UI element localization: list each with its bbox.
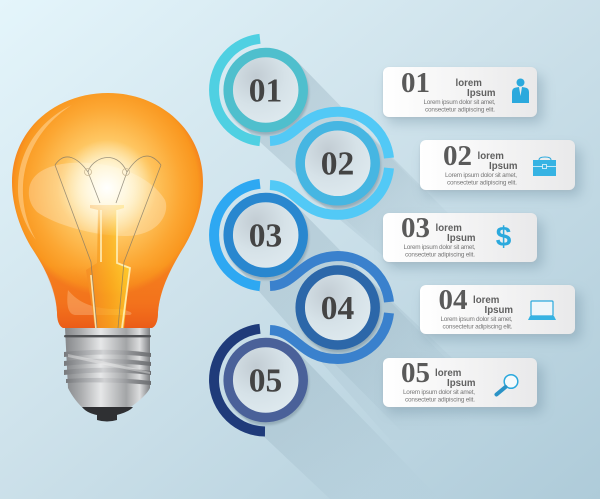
lower reflection <box>67 290 132 315</box>
card 01 heading: Ipsum <box>467 88 496 99</box>
ring shadow 04 <box>297 268 381 352</box>
disc 04 <box>305 274 371 340</box>
disc 02 <box>305 130 371 196</box>
card 03 number: 03 <box>401 212 430 244</box>
outer arc 01 <box>214 39 260 141</box>
filament <box>55 156 161 328</box>
card 03 body: Lorem ipsum dolor sit amet, <box>404 244 476 251</box>
stem light edge <box>91 210 130 328</box>
card 01 number: 01 <box>401 67 430 99</box>
light bulb <box>12 93 203 422</box>
ring 04 <box>300 270 375 345</box>
bulb lower tint <box>42 265 172 328</box>
stem <box>86 205 130 328</box>
card 02 number: 02 <box>443 140 472 172</box>
ring shadow 03 <box>225 196 309 280</box>
card 01 <box>383 67 543 123</box>
base collar <box>64 335 151 337</box>
base cap <box>82 407 133 422</box>
card 04 heading: lorem <box>473 295 500 306</box>
disc 01 <box>233 57 299 123</box>
icon: laptop <box>528 301 556 320</box>
card 01 body: Lorem ipsum dolor sit amet, <box>424 99 496 106</box>
card 03 <box>383 212 543 268</box>
rim highlight <box>18 105 72 240</box>
card 03 heading: Ipsum <box>447 233 476 244</box>
ring 01 <box>228 52 303 128</box>
number 01: 01 <box>249 72 282 110</box>
card 04 heading: Ipsum <box>484 305 513 316</box>
card 05 <box>383 357 543 413</box>
card 05 heading: lorem <box>435 368 462 379</box>
metal base <box>65 328 150 409</box>
card 05 heading: Ipsum <box>447 378 476 389</box>
long shadows behind circles <box>236 60 470 499</box>
card 02 <box>420 140 581 196</box>
icon: dollar sign: $ <box>496 221 512 252</box>
step 04 circle <box>270 256 389 359</box>
card 02 heading: lorem <box>478 151 504 162</box>
bulb highlight <box>29 163 166 236</box>
ring 03 <box>228 198 303 272</box>
outer arcs 02 <box>270 112 389 215</box>
card 05 number: 05 <box>401 357 430 389</box>
card 02 heading: Ipsum <box>489 161 518 172</box>
number 03: 03 <box>249 218 282 254</box>
outer arcs 04 <box>270 256 389 359</box>
outer arc 05 <box>214 329 265 432</box>
step 05 circle <box>214 329 309 432</box>
bulb glass <box>12 93 203 328</box>
icon: person <box>512 78 529 103</box>
card 03 body: consectetur adipiscing elit. <box>405 252 475 258</box>
card 04 number: 04 <box>438 284 468 316</box>
card 05 body: consectetur adipiscing elit. <box>405 396 475 404</box>
card 05 body: Lorem ipsum dolor sit amet, <box>403 389 475 396</box>
disc 03 <box>233 202 299 268</box>
disc 05 <box>233 347 299 413</box>
card 01 body: consectetur adipiscing elit. <box>425 106 495 114</box>
number 04: 04 <box>321 290 354 327</box>
icon: magnifier <box>496 375 518 394</box>
card 02 body: consectetur adipiscing elit. <box>447 180 517 186</box>
step 03 circle <box>214 184 309 286</box>
outer arc 03 <box>214 184 260 286</box>
screw thread <box>64 350 151 385</box>
number 02: 02 <box>321 146 354 182</box>
ring 02 <box>300 126 375 201</box>
card 03 heading: lorem <box>436 223 462 234</box>
card 01 heading: lorem <box>456 78 482 89</box>
ring 05 <box>228 342 303 418</box>
number 05: 05 <box>249 362 282 400</box>
icon: briefcase <box>533 157 556 176</box>
card 04 body: consectetur adipiscing elit. <box>442 324 513 330</box>
ring shadow 02 <box>297 124 381 208</box>
glow <box>57 140 157 236</box>
filament loops <box>84 168 130 176</box>
card 02 body: Lorem ipsum dolor sit amet, <box>445 172 517 179</box>
card 04 <box>420 284 581 340</box>
ring shadow 05 <box>225 341 309 425</box>
card 04 body: Lorem ipsum dolor sit amet, <box>440 316 513 323</box>
step 02 circle <box>270 112 389 215</box>
step 01 circle <box>214 39 309 141</box>
ring shadow 01 <box>225 51 309 135</box>
